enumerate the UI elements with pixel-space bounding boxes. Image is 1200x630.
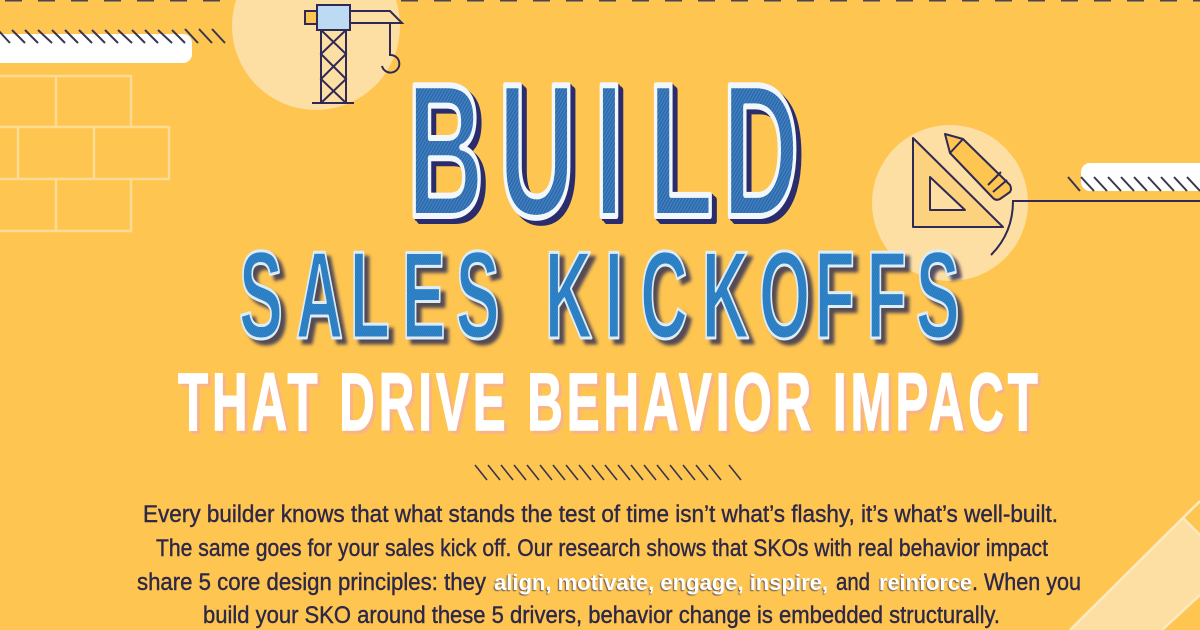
icon: set square and pencil on pale circle: [872, 125, 1200, 281]
intro text block: The same goes for your sales kick off. Our research shows that SKOs with real behavior impact: [156, 535, 1048, 562]
white bar with hatching, top left: [0, 29, 225, 63]
hatched divider: [475, 465, 741, 480]
intro text block: [137, 501, 1081, 629]
intro text block: share 5 core design principles: they: [137, 569, 486, 596]
title: BUILD: BUILD: [407, 44, 799, 257]
pencil corner shape, bottom right: [1070, 501, 1200, 630]
brick wall outline: [0, 76, 169, 231]
intro text block: reinforce: [879, 570, 972, 595]
top dashed border: [5, 0, 1200, 2]
intro text block: and: [836, 569, 870, 596]
white bar with hatching, right: [1068, 163, 1200, 191]
intro text block: align, motivate, engage, inspire,: [494, 570, 828, 595]
title: SALES KICKOFFS: SALES KICKOFFS: [239, 227, 960, 365]
intro text block: Every builder knows that what stands the test of time isn’t what’s flashy, it’s what’s well-built.: [143, 501, 1058, 528]
icon: crane on pale circle: [232, 0, 402, 110]
subtitle: THAT DRIVE BEHAVIOR IMPACT: THAT DRIVE BEHAVIOR IMPACT: [178, 357, 1038, 448]
intro text block: . When you: [972, 569, 1081, 596]
intro text block: build your SKO around these 5 drivers, behavior change is embedded structurally.: [203, 602, 1000, 629]
